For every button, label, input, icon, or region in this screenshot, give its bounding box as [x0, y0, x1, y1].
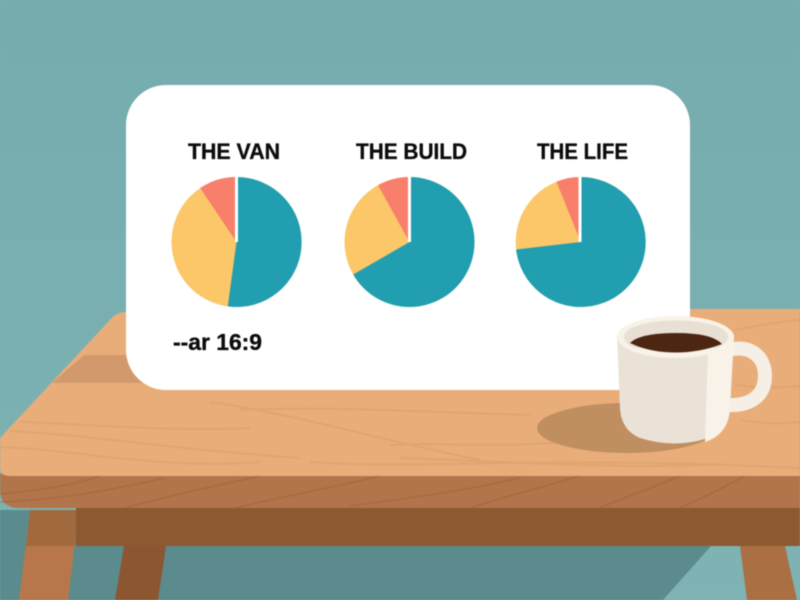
pie chart: the van [172, 176, 302, 307]
cup body [617, 336, 734, 444]
back table leg [115, 546, 166, 600]
right table leg [740, 546, 797, 600]
left front table leg [19, 510, 79, 600]
cup shadow [537, 403, 717, 453]
cup highlight strip [705, 336, 734, 442]
table top [0, 309, 800, 476]
heading: the van: THE VAN [188, 139, 280, 164]
cup handle [728, 349, 765, 405]
heading: the life: THE LIFE [537, 139, 628, 164]
heading: the build: THE BUILD [356, 139, 467, 164]
table apron [76, 508, 800, 546]
white card [126, 85, 690, 390]
floor shadow under table [0, 510, 800, 600]
icon: coffee cup [617, 316, 765, 444]
aspect ratio text: --ar 16:9 [173, 329, 262, 355]
coffee surface [630, 333, 722, 352]
pie chart: the life [516, 176, 646, 307]
cup rim [617, 316, 734, 358]
cup inner wall [624, 320, 728, 348]
pie chart: the build [344, 176, 474, 307]
table edge front [0, 474, 800, 508]
